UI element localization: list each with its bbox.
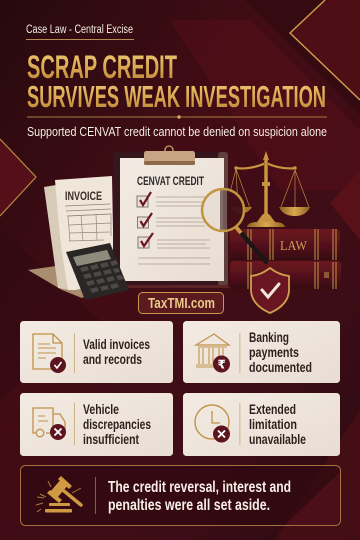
card text: insufficient: [83, 431, 139, 447]
icon: law books: [230, 229, 341, 289]
card text: Valid invoices: [83, 336, 150, 352]
card text: [249, 401, 306, 447]
card text: [249, 329, 312, 375]
brand badge: TaxTMI.com: TaxTMI.com: [148, 295, 215, 312]
card text: Extended: [249, 401, 296, 417]
card: valid invoices: [20, 321, 173, 383]
title divider: [27, 115, 327, 119]
card: vehicle discrepancies: [20, 393, 173, 456]
icon: invoice sheets: [44, 176, 114, 290]
icon: scales of justice: [226, 151, 310, 227]
title: SCRAP CREDIT: [27, 49, 177, 85]
icon: truck with cross: [33, 408, 66, 440]
card text: [83, 401, 151, 447]
icon: folder under invoice: [28, 266, 115, 298]
icon: document with check: [33, 334, 66, 373]
card text: Vehicle: [83, 401, 119, 417]
conclusion text: The credit reversal, interest and: [108, 479, 291, 496]
card text: limitation: [249, 416, 297, 432]
card text: discrepancies: [83, 416, 151, 432]
icon: bank with rupee: ₹: [218, 358, 226, 372]
icon: clipboard: CENVAT CREDIT: [137, 174, 204, 188]
card text: payments: [249, 344, 299, 360]
icon: gavel: [36, 476, 81, 512]
title: [27, 49, 326, 114]
icon: calculator: [66, 243, 129, 300]
card text: [83, 336, 150, 367]
icon: bank with rupee: [196, 334, 230, 372]
checklist: [137, 192, 210, 264]
card text: Banking: [249, 329, 289, 345]
conclusion text: penalties were all set aside.: [108, 497, 270, 514]
card: banking payments: [183, 321, 340, 383]
clipboard clip: [144, 146, 195, 165]
card text: documented: [249, 359, 312, 375]
icon: magnifying glass: [202, 189, 266, 262]
icon: law books: LAW: [280, 238, 307, 253]
card: extended limitation: [183, 393, 340, 456]
card text: unavailable: [249, 431, 306, 447]
card text: and records: [83, 351, 142, 367]
eyebrow: case law label: [26, 24, 134, 40]
icon: clock with cross: [195, 405, 230, 442]
illustration: [28, 146, 341, 313]
icon: shield with check: [251, 268, 289, 313]
brand badge: TaxTMI.com: [138, 292, 224, 314]
conclusion text: [108, 479, 291, 514]
eyebrow: case law label: Case Law - Central Excise: [26, 24, 133, 36]
icon: invoice sheets: INVOICE: [65, 189, 102, 203]
panel: conclusion: [20, 466, 340, 526]
icon: clipboard: [113, 146, 230, 288]
